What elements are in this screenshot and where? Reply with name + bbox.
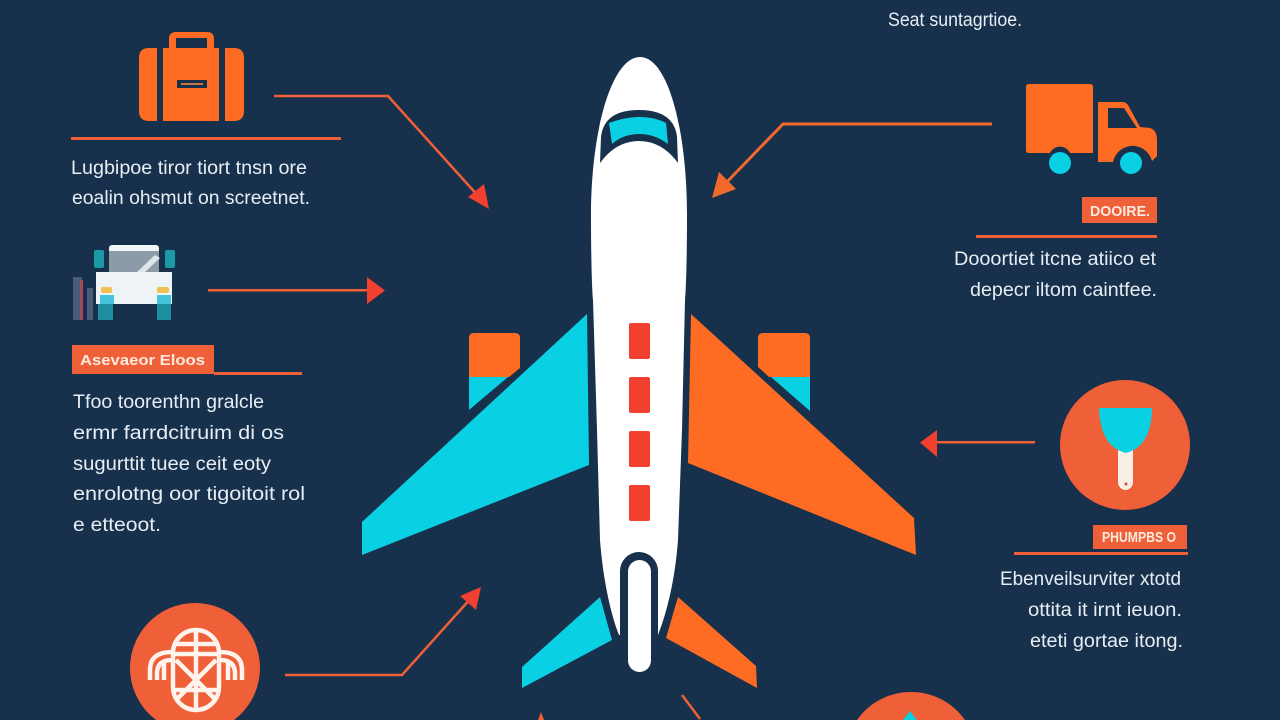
vehicle text (73, 392, 305, 536)
truck label: DOOIRE. (1090, 203, 1150, 220)
vehicle text: ermr farrdcitruim di os (73, 423, 284, 444)
icon: vehicle (73, 245, 175, 320)
arrow stub: bottom center left (538, 712, 544, 720)
panel: delivery truck (712, 84, 1157, 301)
arrow stub: bottom center right (682, 695, 700, 719)
panel: vehicle (72, 245, 305, 536)
arrow: vehicle to plane (208, 277, 385, 304)
right circle text: eteti gortae itong. (1030, 631, 1183, 652)
icon: truck (1026, 84, 1157, 174)
right circle text: ottita it irnt ieuon. (1028, 600, 1182, 621)
wing left (362, 314, 589, 555)
vehicle label: Asevaeor Eloos (80, 352, 205, 369)
panel: bottom left globe (130, 603, 260, 720)
truck text (954, 249, 1157, 301)
arrow: truck to plane (712, 124, 992, 198)
panel: right circle (1000, 380, 1190, 652)
right circle text (1000, 569, 1183, 652)
panel: bottom right circle (857, 692, 965, 720)
arrow: bottom left to plane (285, 587, 481, 675)
right circle text: Ebenveilsurviter xtotd (1000, 569, 1181, 590)
arrow: luggage to plane (274, 96, 489, 209)
vehicle text: e etteoot. (73, 515, 161, 536)
icon circle: network (130, 603, 260, 720)
panel: luggage (71, 32, 341, 209)
truck text: depecr iltom caintfee. (970, 280, 1157, 301)
icon: cyan peak (903, 711, 917, 720)
icon: suitcase (139, 32, 244, 121)
vehicle text: enrolotng oor tigoitoit rol (73, 484, 305, 505)
right circle label: PHUMPBS O (1102, 529, 1176, 546)
right circle label (1093, 525, 1187, 549)
tail fin left (522, 597, 612, 688)
tail cone (628, 560, 651, 672)
engine right (758, 333, 810, 411)
icon: network glyph (150, 630, 242, 710)
luggage text: Lugbipoe tiror tiort tnsn ore (71, 158, 307, 179)
truck text: Dooortiet itcne atiico et (954, 249, 1157, 270)
fuselage (591, 57, 687, 635)
top right text fragment: Seat suntagrtioe. (888, 10, 1022, 31)
tail slot (620, 552, 658, 640)
vehicle label (72, 345, 214, 374)
icon: scoop (1099, 408, 1152, 490)
truck label (1082, 197, 1157, 223)
vehicle text: Tfoo toorenthn gralcle (73, 392, 264, 413)
arrow: right circle to plane (920, 430, 1035, 457)
cockpit frame (600, 110, 678, 163)
tail fin right (666, 597, 757, 688)
icon circle (1060, 380, 1190, 510)
airplane illustration (362, 57, 916, 688)
cockpit window (609, 117, 668, 144)
luggage text (71, 158, 310, 209)
wing right (688, 314, 916, 555)
cabin windows (629, 323, 650, 521)
luggage text: eoalin ohsmut on screetnet. (72, 188, 310, 209)
engine left (469, 333, 520, 410)
vehicle text: sugurttit tuee ceit eoty (73, 454, 272, 475)
